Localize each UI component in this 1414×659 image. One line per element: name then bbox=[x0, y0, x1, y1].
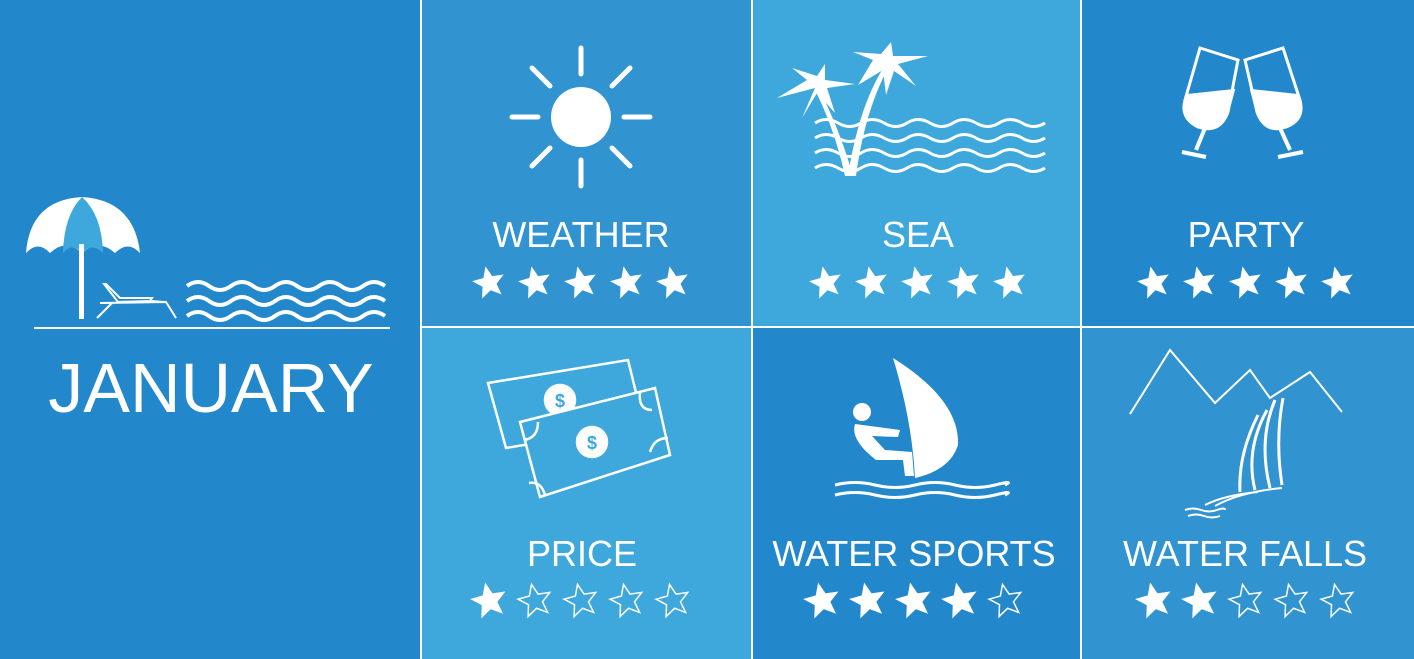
heading: PRICE: PRICE bbox=[527, 533, 637, 574]
icon: windsurfer bbox=[835, 358, 1008, 498]
heading: SEA: SEA bbox=[882, 214, 954, 255]
title: JANUARY: JANUARY bbox=[48, 349, 374, 427]
rating: 5 stars bbox=[809, 266, 1025, 298]
heading: WATER SPORTS: WATER SPORTS bbox=[772, 533, 1056, 574]
rating: 5 stars bbox=[1137, 266, 1353, 298]
panel: price: $ bbox=[555, 391, 565, 411]
rating: 5 stars bbox=[472, 266, 688, 298]
icon: palms and sea bbox=[777, 42, 1045, 176]
panel: water sports bbox=[772, 358, 1056, 616]
panel: weather bbox=[472, 48, 688, 298]
heading: PARTY: PARTY bbox=[1188, 214, 1304, 255]
icon: beach umbrella bbox=[26, 197, 140, 319]
icon: lounger bbox=[97, 284, 176, 318]
rating: 2 of 5 stars bbox=[1137, 584, 1353, 616]
icon: waves bbox=[187, 282, 385, 320]
panel: sea bbox=[777, 42, 1045, 298]
rating: 4 of 5 stars bbox=[805, 584, 1021, 616]
panel: price: $ bbox=[587, 433, 597, 453]
icon: mountains and waterfall bbox=[1130, 350, 1342, 518]
icon: champagne glasses bbox=[1182, 48, 1303, 157]
icon: sun bbox=[512, 48, 650, 186]
panel: price bbox=[472, 360, 688, 616]
panel: water falls bbox=[1123, 350, 1367, 616]
heading: WEATHER: WEATHER bbox=[492, 214, 670, 255]
icon: banknotes bbox=[488, 360, 670, 497]
panel: party bbox=[1137, 48, 1353, 298]
rating: 1 of 5 stars bbox=[472, 584, 688, 616]
panel: january bbox=[26, 197, 390, 427]
heading: WATER FALLS: WATER FALLS bbox=[1123, 533, 1367, 574]
